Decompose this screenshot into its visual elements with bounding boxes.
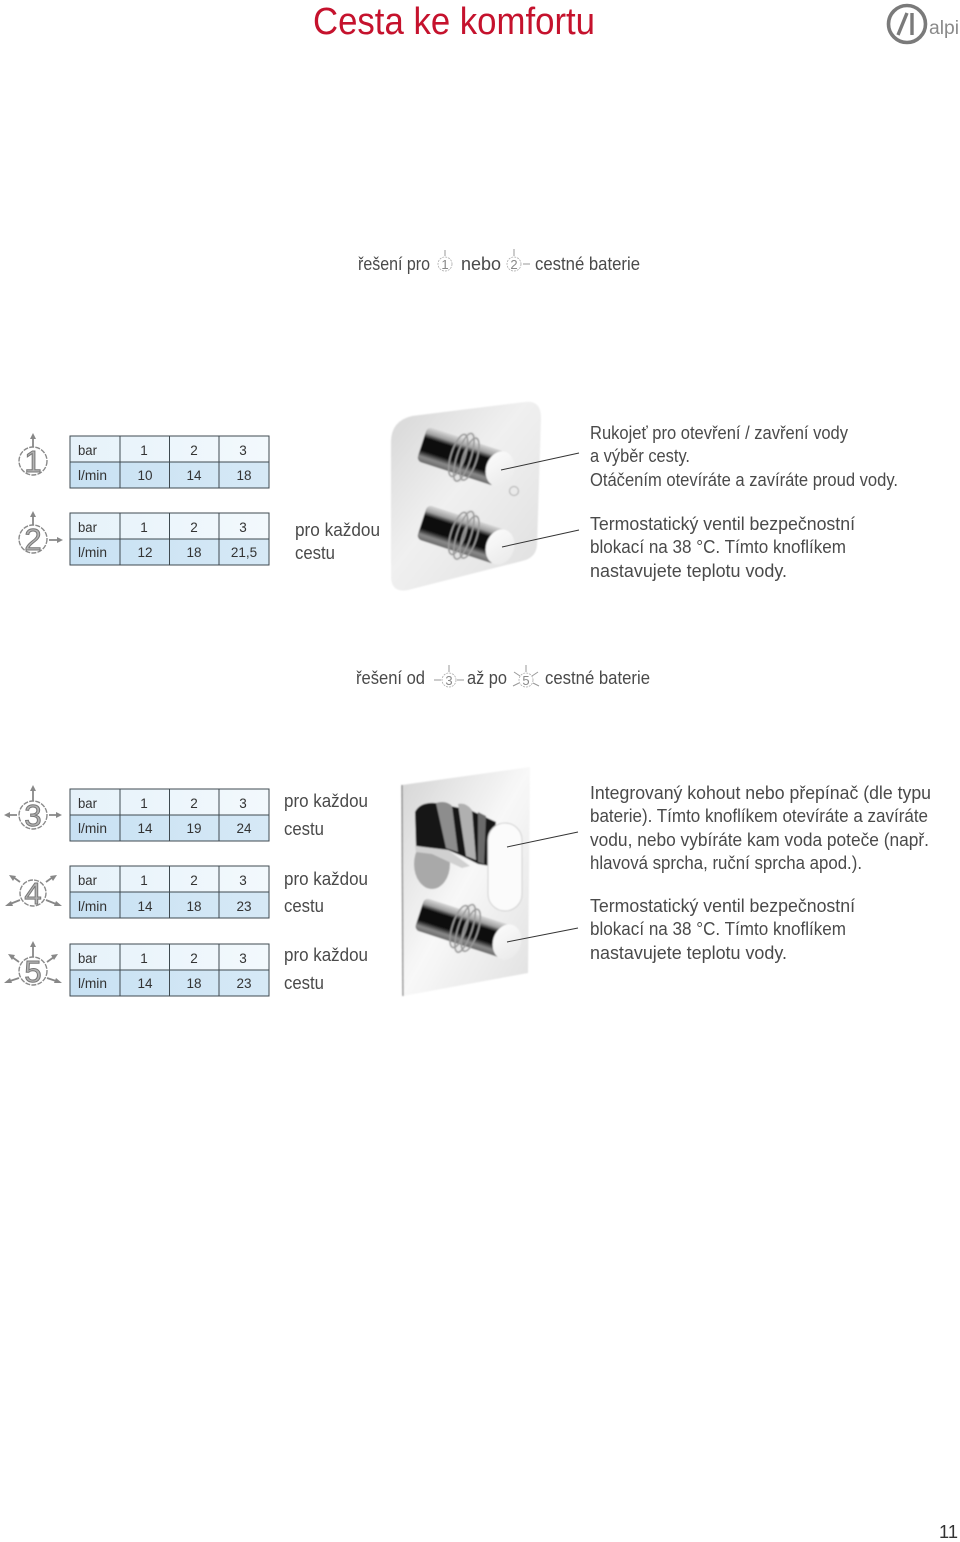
text block: integrated tap description: hlavová sprcha, ruční sprcha apod.). (590, 853, 862, 873)
table: 3 ways flow: 2 (190, 796, 198, 811)
icon: 2 ways (19, 511, 63, 557)
table: 5 ways flow: 3 (239, 951, 247, 966)
page number: 11 (939, 1522, 958, 1542)
icon: small 3 (434, 665, 464, 688)
heading: solutions for 1 or 2 ways: řešení pro (358, 254, 430, 274)
table: 4 ways flow: 1 (140, 873, 148, 888)
table: 3 ways flow: l/min (78, 821, 107, 836)
table: 4 ways flow: 2 (190, 873, 198, 888)
table: 2 ways flow: 1 (140, 520, 148, 535)
text block: integrated tap description (590, 783, 931, 873)
table: 1 way flow: 1 (140, 443, 148, 458)
heading: solutions for 1 or 2 ways: cestné baterie (535, 254, 640, 274)
text block: thermostatic valve description 2: nastavujete teplotu vody. (590, 943, 787, 963)
labels: per way for tables 3 to 5 (284, 791, 368, 993)
heading: solutions from 3 to 5 ways (356, 665, 650, 688)
text block: handle description: Rukojeť pro otevření / zavření vody (590, 423, 848, 443)
table: 1 way flow: 2 (190, 443, 198, 458)
table: 4 ways flow (70, 866, 269, 918)
product: mixer with diverter (402, 767, 530, 996)
table: 4 ways flow: 23 (236, 899, 252, 914)
table: 4 ways flow: 14 (137, 899, 153, 914)
icon: small 2: 2 (510, 257, 518, 272)
table: 3 ways flow: 3 (239, 796, 247, 811)
table: 4 ways flow: l/min (78, 899, 107, 914)
table: 4 ways flow: 3 (239, 873, 247, 888)
icon: 5 ways (4, 941, 62, 989)
table: 2 ways flow: 2 (190, 520, 198, 535)
text block: thermostatic valve description: nastavujete teplotu vody. (590, 561, 787, 581)
table: 4 ways flow: 18 (186, 899, 202, 914)
icon: 4 ways (5, 875, 62, 911)
icon: small 2 (507, 249, 530, 272)
table: 5 ways flow: bar (78, 951, 97, 966)
table: 3 ways flow (70, 789, 269, 841)
table: 1 way flow: bar (78, 443, 97, 458)
heading: solutions from 3 to 5 ways: cestné baterie (545, 668, 650, 688)
table: 2 ways flow: 18 (186, 545, 202, 560)
icon: small 5: 5 (522, 673, 530, 688)
table: 3 ways flow: 19 (186, 821, 202, 836)
icon: 5 ways: 5 (24, 954, 42, 989)
title: Cesta ke komfortu (313, 1, 595, 43)
table: 3 ways flow: bar (78, 796, 97, 811)
heading: solutions for 1 or 2 ways: nebo (461, 254, 501, 274)
text block: thermostatic valve description 2 (590, 896, 855, 963)
table: 2 ways flow: 3 (239, 520, 247, 535)
table: 4 ways flow: bar (78, 873, 97, 888)
table: 1 way flow: 18 (236, 468, 252, 483)
table: 5 ways flow: 2 (190, 951, 198, 966)
table: 2 ways flow: 12 (137, 545, 153, 560)
text block: integrated tap description: baterie). Tímto knoflíkem otevíráte a zavíráte (590, 806, 928, 826)
table: 2 ways flow: bar (78, 520, 97, 535)
text block: handle description (590, 423, 898, 490)
table: 3 ways flow: 24 (236, 821, 252, 836)
table: 5 ways flow (70, 944, 269, 996)
text block: thermostatic valve description 2: Termostatický ventil bezpečnostní (590, 896, 855, 916)
leader line: thermostat knob (507, 928, 578, 942)
table: 2 ways flow: 21,5 (231, 545, 257, 560)
text block: handle description: Otáčením otevíráte a zavíráte proud vody. (590, 470, 898, 490)
table: 1 way flow: 10 (137, 468, 153, 483)
table: 3 ways flow: 14 (137, 821, 153, 836)
logo: alpi (888, 6, 959, 42)
table: 5 ways flow: 18 (186, 976, 202, 991)
label: per way (295, 520, 380, 563)
icon: 4 ways: 4 (24, 876, 42, 911)
table: 5 ways flow: l/min (78, 976, 107, 991)
table: 1 way flow (70, 436, 269, 488)
table: 5 ways flow: 23 (236, 976, 252, 991)
icon: 3 ways (4, 785, 62, 833)
label: per way: cestu (295, 543, 335, 563)
leader line: diverter handle (507, 832, 578, 847)
heading: solutions from 3 to 5 ways: až po (467, 668, 507, 688)
leader line: upper knob (501, 453, 579, 470)
table: 1 way flow: 14 (186, 468, 202, 483)
table: 5 ways flow: 14 (137, 976, 153, 991)
table: 3 ways flow: 1 (140, 796, 148, 811)
labels: per way for tables 3 to 5: pro každou (284, 869, 368, 889)
icon: small 1: 1 (441, 257, 449, 272)
icon: 1 way (19, 433, 47, 479)
label: per way: pro každou (295, 520, 380, 540)
text block: thermostatic valve description (590, 514, 855, 581)
logo: alpi: alpi (929, 18, 959, 39)
product: two-knob mixer (391, 402, 541, 590)
labels: per way for tables 3 to 5: pro každou (284, 945, 368, 965)
table: 2 ways flow: l/min (78, 545, 107, 560)
heading: solutions from 3 to 5 ways: řešení od (356, 668, 425, 688)
text block: handle description: a výběr cesty. (590, 446, 690, 466)
labels: per way for tables 3 to 5: cestu (284, 819, 324, 839)
text block: thermostatic valve description 2: blokací na 38 °C. Tímto knoflíkem (590, 919, 846, 939)
heading: solutions for 1 or 2 ways (358, 249, 640, 274)
table: 2 ways flow (70, 513, 269, 565)
table: 1 way flow: l/min (78, 468, 107, 483)
text block: integrated tap description: Integrovaný kohout nebo přepínač (dle typu (590, 783, 931, 803)
table: 1 way flow: 3 (239, 443, 247, 458)
labels: per way for tables 3 to 5: cestu (284, 896, 324, 916)
icon: small 1 (438, 250, 452, 272)
text block: integrated tap description: vodu, nebo vybíráte kam voda poteče (např. (590, 830, 929, 850)
text block: thermostatic valve description: Termostatický ventil bezpečnostní (590, 514, 855, 534)
labels: per way for tables 3 to 5: pro každou (284, 791, 368, 811)
icon: 3 ways: 3 (24, 798, 42, 833)
icon: 2 ways: 2 (24, 522, 42, 557)
labels: per way for tables 3 to 5: cestu (284, 973, 324, 993)
text block: thermostatic valve description: blokací na 38 °C. Tímto knoflíkem (590, 537, 846, 557)
icon: small 5 (513, 665, 539, 688)
icon: 1 way: 1 (24, 444, 42, 479)
table: 5 ways flow: 1 (140, 951, 148, 966)
icon: small 3: 3 (445, 673, 453, 688)
leader line: lower knob (502, 530, 579, 547)
